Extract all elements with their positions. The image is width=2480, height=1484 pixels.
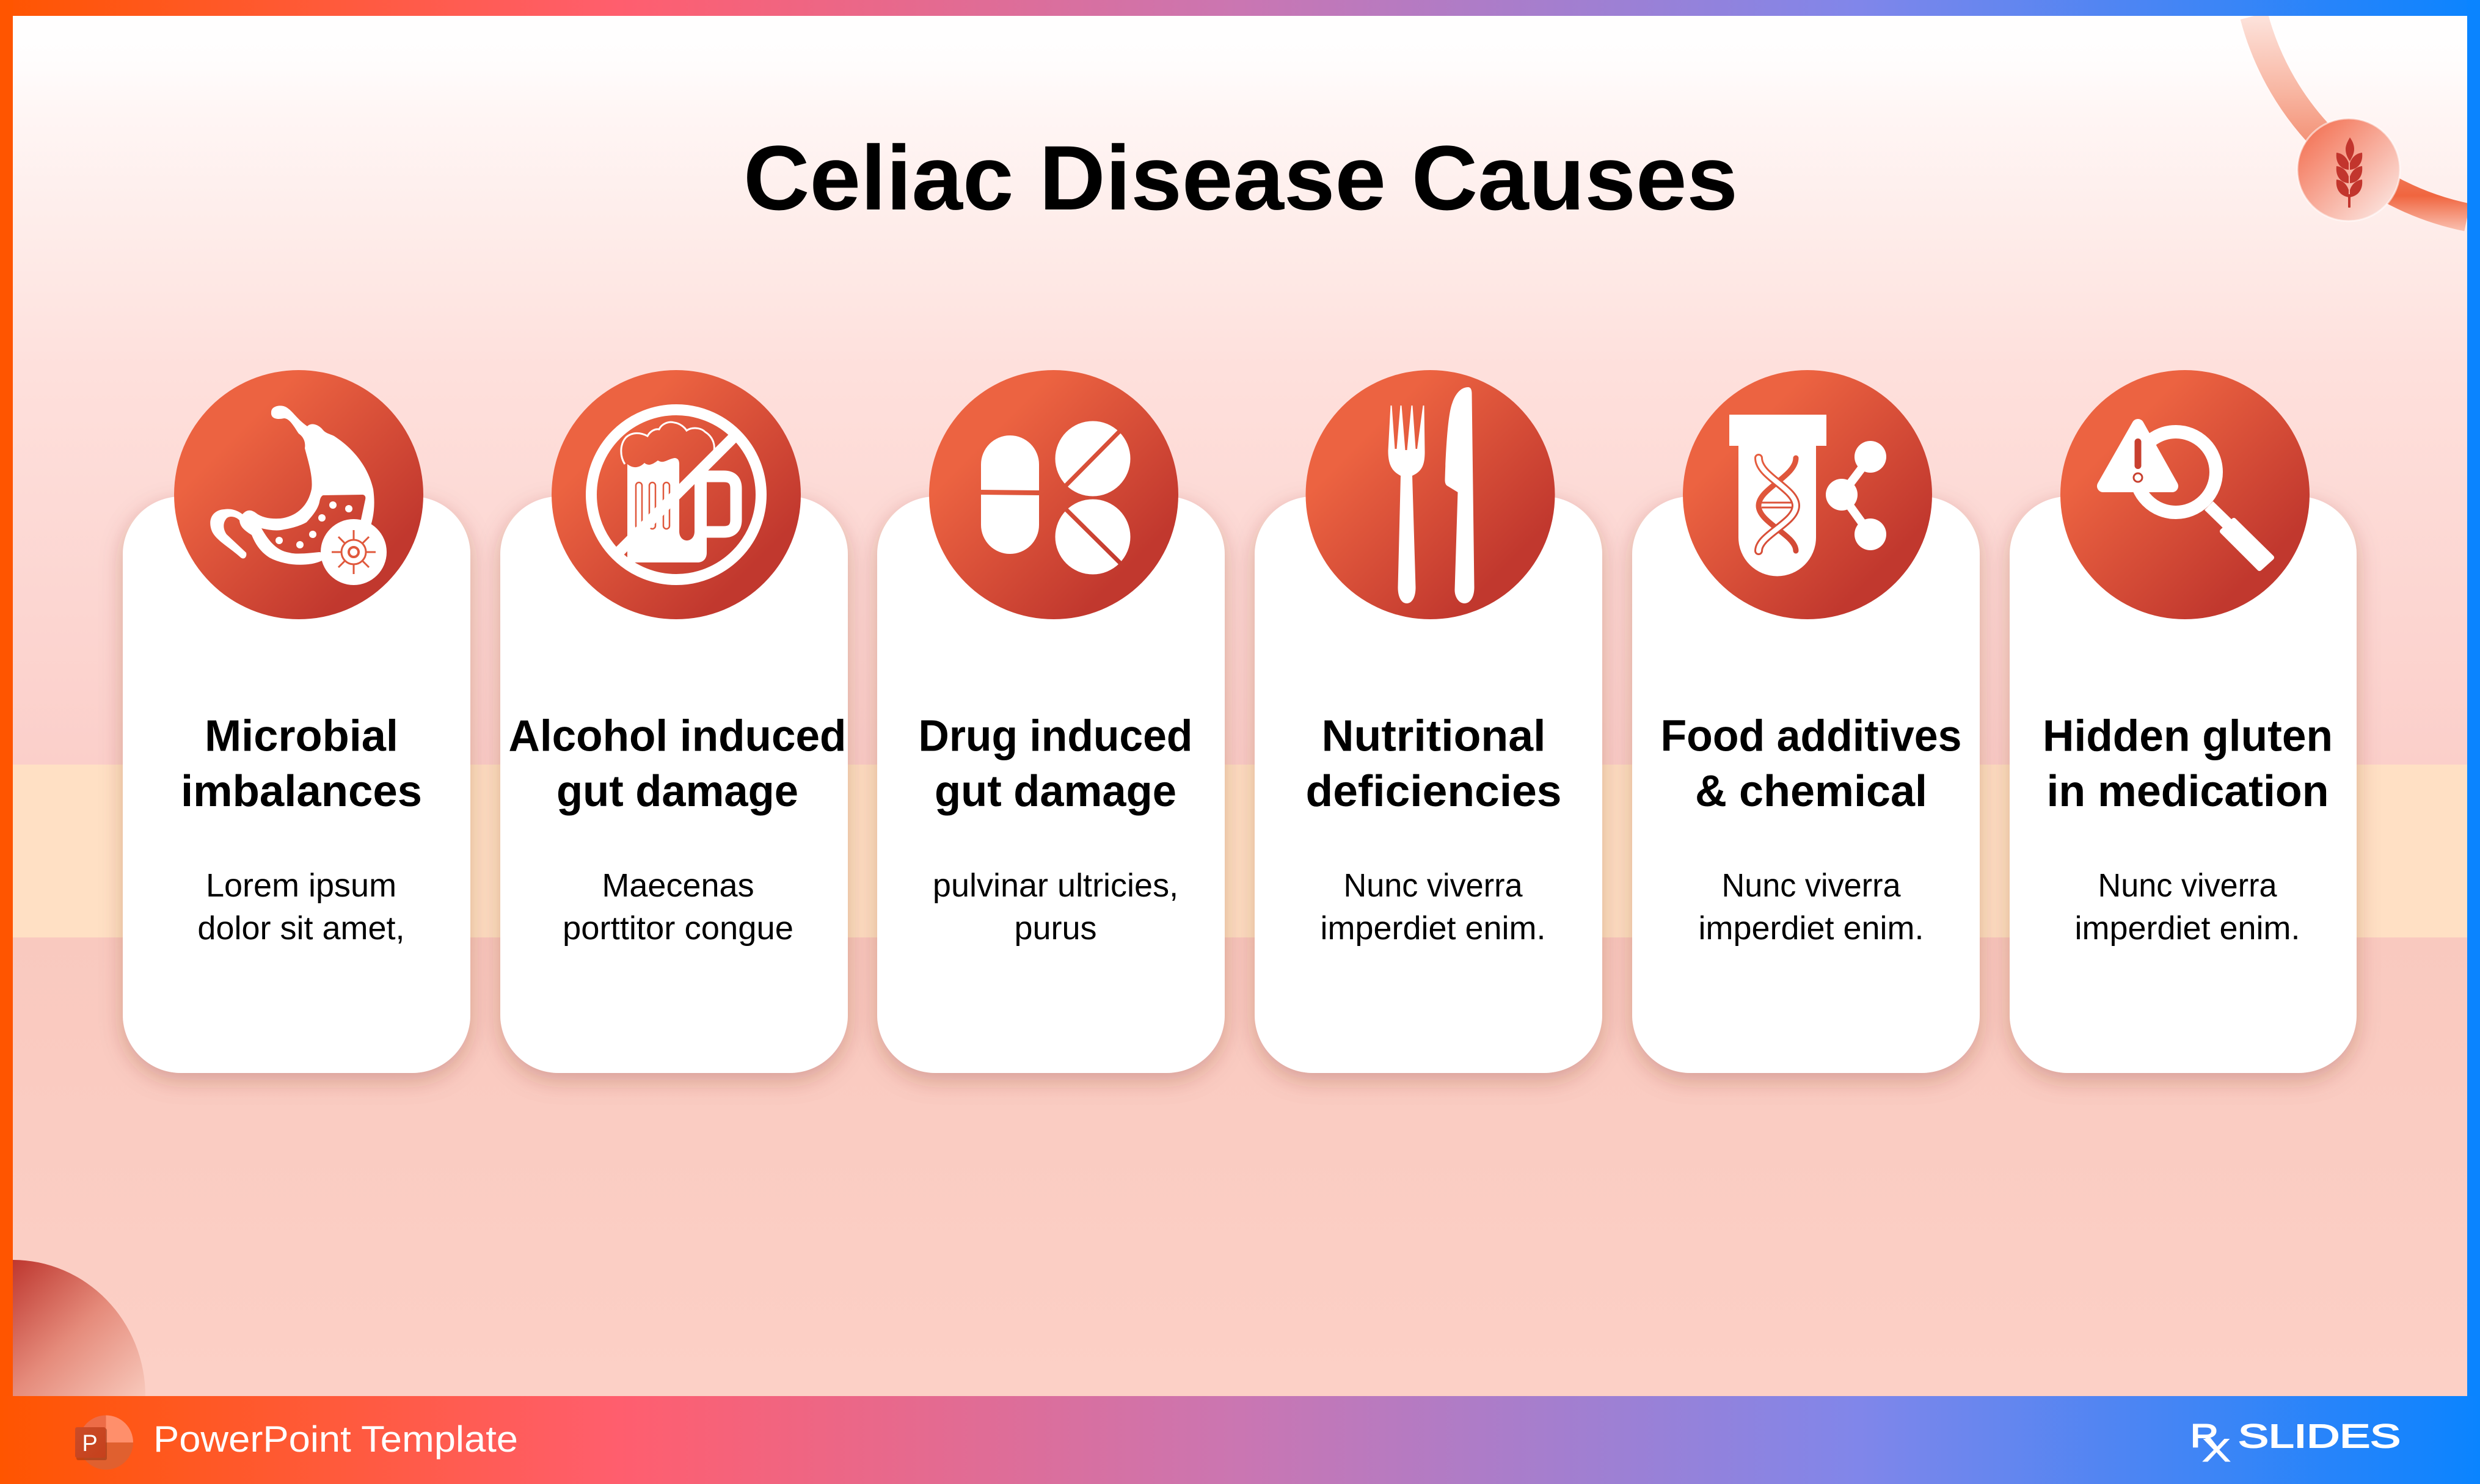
- heading: Microbial: [205, 712, 398, 761]
- icon: fork and knife: [1306, 370, 1555, 619]
- body text: [2074, 867, 2300, 947]
- heading: [2043, 712, 2333, 816]
- title: Celiac Disease Causes: [743, 126, 1738, 229]
- body text: Lorem ipsum: [206, 867, 396, 904]
- frame: right border: [2467, 0, 2480, 1484]
- footer bar: [0, 1396, 2480, 1484]
- heading: in medication: [2046, 767, 2329, 816]
- body text: Nunc viverra: [1344, 867, 1523, 904]
- body text: [1698, 867, 1924, 947]
- body text: imperdiet enim.: [1321, 910, 1545, 947]
- heading: gut damage: [935, 767, 1176, 816]
- heading: [1306, 712, 1561, 816]
- logo: RxSlides: X: [2202, 1433, 2231, 1469]
- icon: test tube with DNA and molecule: [1683, 370, 1932, 619]
- heading: Hidden gluten: [2043, 712, 2333, 761]
- body text: [1321, 867, 1545, 947]
- body text: imperdiet enim.: [2074, 910, 2300, 947]
- panel: hidden gluten in medication: [2010, 370, 2357, 1073]
- heading: gut damage: [556, 767, 798, 816]
- decorative arc with wheat badge: [2254, 16, 2467, 221]
- icon: PowerPoint logo: [75, 1416, 133, 1469]
- body text: purus: [1014, 910, 1097, 947]
- body text: pulvinar ultricies,: [933, 867, 1178, 904]
- panel: alcohol induced gut damage: [500, 370, 848, 1073]
- footer label: PowerPoint Template: [153, 1419, 518, 1460]
- body text: Maecenas: [602, 867, 754, 904]
- heading: deficiencies: [1306, 767, 1561, 816]
- frame: top bar: [0, 0, 2480, 16]
- icon: pills: [929, 370, 1178, 619]
- heading: Alcohol induced: [508, 712, 847, 761]
- body text: Nunc viverra: [1721, 867, 1901, 904]
- heading: Nutritional: [1322, 712, 1545, 761]
- icon: stomach with bacterium: [174, 370, 423, 619]
- panel: food additives and chemical: [1632, 370, 1980, 1073]
- heading: [508, 712, 847, 816]
- heading: & chemical: [1695, 767, 1927, 816]
- body text: dolor sit amet,: [197, 910, 405, 947]
- logo: RxSlides: SLIDES: [2238, 1418, 2401, 1455]
- body text: imperdiet enim.: [1698, 910, 1924, 947]
- frame: left border: [0, 0, 13, 1484]
- body text: [563, 867, 793, 947]
- bottom-left quarter circle: [13, 1260, 145, 1396]
- heading: [181, 712, 422, 816]
- panel: microbial imbalances: [123, 370, 470, 1073]
- heading: [919, 712, 1192, 816]
- peach horizontal band: [13, 765, 2468, 937]
- panel: nutritional deficiencies: [1255, 370, 1602, 1073]
- icon: PowerPoint logo: P: [82, 1431, 98, 1457]
- heading: Food additives: [1660, 712, 1962, 761]
- icon: magnifier with warning triangle: [2060, 370, 2310, 619]
- heading: [1660, 712, 1962, 816]
- logo: RxSlides: R: [2190, 1418, 2219, 1454]
- body text: Nunc viverra: [2098, 867, 2277, 904]
- panel: drug induced gut damage: [877, 370, 1225, 1073]
- body text: porttitor congue: [563, 910, 793, 947]
- body text: [933, 867, 1178, 947]
- heading: Drug induced: [919, 712, 1192, 761]
- icon: no beer: [552, 370, 801, 619]
- logo: RxSlides: [2190, 1418, 2401, 1469]
- icon: wheat badge: [2297, 118, 2400, 221]
- heading: imbalances: [181, 767, 422, 816]
- body text: [197, 867, 405, 947]
